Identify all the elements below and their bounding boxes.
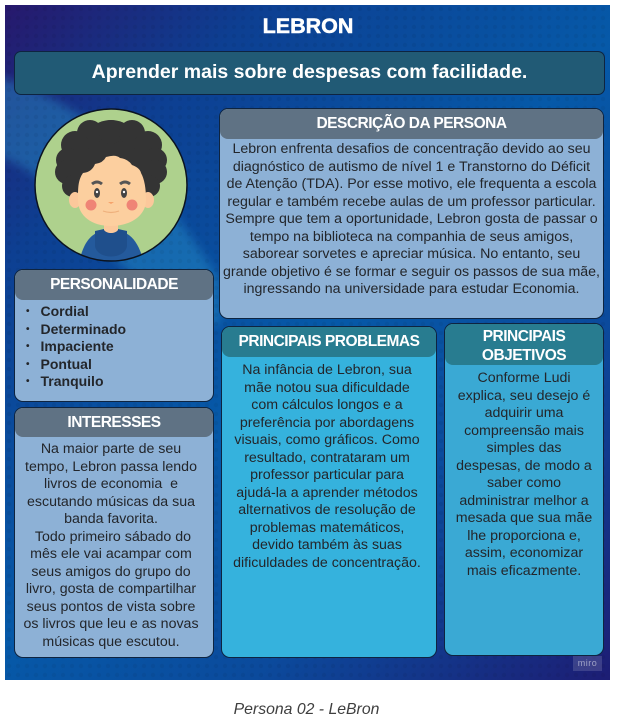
objetivos text: simples das bbox=[487, 440, 561, 456]
problemas text: devido também às suas bbox=[252, 537, 402, 553]
interesses text: tempo, Lebron passa lendo bbox=[25, 458, 197, 474]
problemas text: dificuldades de concentração. bbox=[233, 554, 421, 570]
objetivos text: assim, economizar bbox=[465, 545, 583, 561]
panel: personalidade: Tranquilo bbox=[40, 373, 104, 389]
interesses text bbox=[23, 441, 199, 650]
descrição text bbox=[223, 141, 600, 297]
problemas text: Na infância de Lebron, sua bbox=[242, 362, 412, 378]
interesses text: Na maior parte de seu bbox=[41, 441, 181, 457]
heading: personalidade bbox=[15, 270, 213, 300]
panel: personalidade: • bbox=[26, 306, 30, 317]
panel: personalidade: • bbox=[26, 341, 30, 352]
problemas text: visuais, como gráficos. Como bbox=[234, 432, 420, 448]
objetivos text: despesas, de modo a bbox=[456, 458, 592, 474]
objetivos text: administrar melhor a bbox=[459, 492, 589, 508]
heading: problemas bbox=[222, 327, 436, 357]
heading: descrição bbox=[220, 109, 603, 139]
panel: principais objetivos bbox=[444, 323, 604, 656]
problemas text: mãe notou sua dificuldade bbox=[244, 380, 410, 396]
objetivos text: mesada que sua mãe bbox=[456, 510, 592, 526]
heading bar bbox=[14, 51, 605, 95]
problemas text: alternativos de resolução de bbox=[238, 502, 416, 518]
panel: interesses bbox=[14, 407, 214, 658]
interesses text: livros de economia e bbox=[44, 476, 178, 492]
descrição text: diagnóstico de autismo de nível 1 e Transtorno do Déficit bbox=[233, 158, 590, 174]
interesses text: seus pontos de vista sobre bbox=[27, 598, 195, 614]
interesses text: mês ele vai acampar com bbox=[30, 546, 192, 562]
heading: personalidade: PERSONALIDADE bbox=[50, 276, 178, 293]
miro badge: miro bbox=[578, 658, 597, 668]
panel: personalidade: Determinado bbox=[40, 320, 126, 336]
descrição text: tempo na biblioteca na companhia de seus amigos, bbox=[250, 228, 573, 244]
descrição text: de Atenção (TDA). Por esse motivo, ele frequenta a escola bbox=[227, 176, 596, 192]
panel: personalidade bbox=[14, 269, 214, 402]
problemas text: resultado, contrataram um bbox=[244, 450, 410, 466]
panel: personalidade: Impaciente bbox=[40, 338, 114, 354]
problemas text: preferência por abordagens bbox=[240, 414, 414, 430]
interesses text: escutando músicas da sua bbox=[27, 494, 195, 510]
objetivos text: adquirir uma bbox=[485, 405, 563, 421]
objetivos text: compreensão mais bbox=[464, 422, 584, 438]
panel: personalidade: Cordial bbox=[40, 303, 89, 319]
list of traits bbox=[26, 303, 126, 389]
objetivos text bbox=[456, 370, 592, 578]
descrição text: Sempre que tem a oportunidade, Lebron gosta de passar o bbox=[225, 211, 598, 227]
panel: personalidade: Pontual bbox=[40, 356, 92, 372]
problemas text: com cálculos longos e a bbox=[251, 397, 403, 413]
heading: interesses: INTERESSES bbox=[67, 414, 161, 431]
panel: personalidade: • bbox=[26, 358, 30, 370]
problemas text: professor particular para bbox=[250, 467, 404, 483]
panel: personalidade: • bbox=[26, 376, 30, 387]
descrição text: saborear sorvetes e apreciar música. No entanto, seu bbox=[243, 246, 580, 262]
objetivos text: explica, seu desejo é bbox=[458, 388, 590, 404]
panel: principais problemas bbox=[221, 326, 437, 658]
interesses text: Todo primeiro sábado do bbox=[35, 528, 191, 544]
interesses text: seus amigos do grupo do bbox=[31, 564, 191, 580]
panel: descrição da persona bbox=[219, 108, 604, 319]
objetivos text: saber como bbox=[487, 475, 561, 491]
brand title: LEBRON bbox=[263, 14, 353, 38]
descrição text: ingressando na universidade para estudar Economia. bbox=[244, 281, 579, 297]
heading: objetivos: PRINCIPAIS bbox=[483, 328, 565, 345]
descrição text: grande objetivo é se formar e seguir os passos de sua mãe, bbox=[223, 264, 600, 280]
avatar illustration bbox=[34, 108, 188, 262]
interesses text: os livros que leu e as novas bbox=[23, 616, 199, 632]
heading: objetivos: OBJETIVOS bbox=[482, 347, 566, 364]
problemas text: ajudá-la a aprender métodos bbox=[236, 484, 418, 500]
objetivos text: mais eficazmente. bbox=[467, 562, 581, 578]
objetivos text: lhe proporciona e, bbox=[467, 528, 581, 544]
heading bar: Aprender mais sobre despesas com facilidade. bbox=[92, 61, 527, 83]
interesses text: músicas que escutou. bbox=[42, 634, 180, 650]
caption: Persona 02 - LeBron bbox=[234, 701, 379, 718]
objetivos text: Conforme Ludi bbox=[477, 370, 571, 386]
problemas text bbox=[233, 362, 421, 570]
heading: problemas: PRINCIPAIS PROBLEMAS bbox=[239, 333, 419, 350]
heading: interesses bbox=[15, 408, 213, 437]
interesses text: banda favorita. bbox=[64, 511, 158, 527]
panel: personalidade: • bbox=[26, 324, 30, 334]
descrição text: regular e também recebe aulas de um professor particular. bbox=[227, 194, 596, 210]
descrição text: Lebron enfrenta desafios de concentração devido ao seu bbox=[232, 141, 591, 157]
interesses text: livro, gosta de compartilhar bbox=[26, 581, 196, 597]
heading: descrição: DESCRIÇÃO DA PERSONA bbox=[316, 115, 507, 132]
heading: objetivos bbox=[445, 324, 603, 365]
miro badge bbox=[573, 656, 602, 671]
problemas text: problemas matemáticos, bbox=[250, 520, 404, 536]
